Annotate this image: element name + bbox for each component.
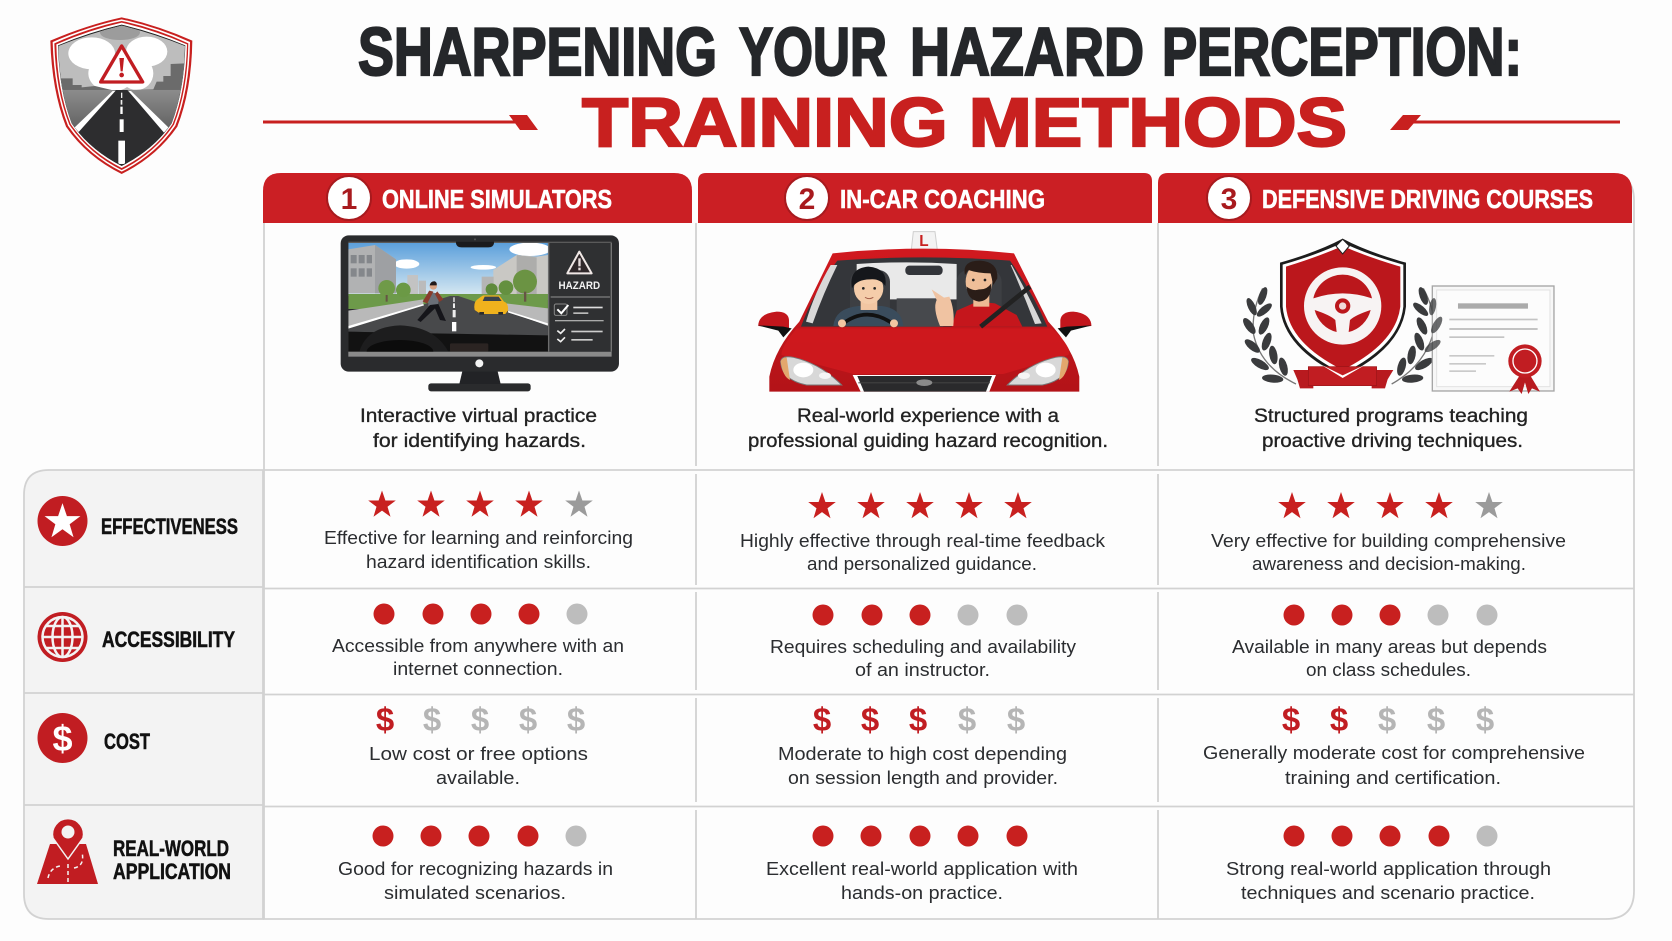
header: defensive driving courses: 3 [1221,183,1237,216]
header: online simulators: ONLINE SIMULATORS [382,184,612,214]
cost: defensive courses: Generally moderate cost for comprehensive [1203,742,1585,763]
row label: effectiveness: EFFECTIVENESS [101,514,238,539]
cost: in-car coaching: $ [958,701,976,738]
effectiveness: defensive courses: Very effective for building comprehensive [1211,530,1566,551]
illustration: simulator monitor [341,235,619,391]
cost: online simulators: Low cost or free options [369,743,588,764]
accessibility: in-car coaching: Requires scheduling and availability [770,636,1077,657]
cost: in-car coaching: $ [861,701,879,738]
text: simulators description: for identifying hazards. [373,430,586,452]
header: online simulators [263,173,692,223]
text: defensive courses description: proactive driving techniques. [1262,430,1523,452]
effectiveness: defensive courses: awareness and decision-making. [1252,553,1526,574]
text: coaching description: Real-world experience with a [797,405,1059,427]
real-world application: defensive courses [1226,826,1551,903]
cost: defensive courses: $ [1427,701,1445,738]
accessibility: defensive courses: on class schedules. [1306,659,1471,680]
real-world application: online simulators: simulated scenarios. [384,882,566,903]
cost: in-car coaching: on session length and provider. [788,767,1058,788]
accessibility: in-car coaching [770,604,1077,680]
accessibility: online simulators: Accessible from anywhere with an [332,635,624,656]
illustration: red training car [758,232,1092,392]
header: in-car coaching [698,173,1152,223]
row label: effectiveness [38,496,238,546]
title: TRAINING METHODS [582,84,1347,161]
real-world application: online simulators: Good for recognizing hazards in [338,858,613,879]
real-world application: online simulators [338,826,613,903]
real-world application: in-car coaching: Excellent real-world application with [766,858,1078,879]
accessibility: online simulators [332,604,624,679]
effectiveness: in-car coaching: Highly effective through real-time feedback [740,530,1106,551]
cost: defensive courses: training and certification. [1285,767,1501,788]
header: defensive driving courses: DEFENSIVE DRIVING COURSES [1262,184,1593,214]
row label: real-world application [37,819,231,884]
cost: in-car coaching: $ [813,701,831,738]
row label: cost: COST [104,729,150,754]
title rule left [263,115,538,130]
cost: online simulators: $ [567,701,585,738]
cost: in-car coaching: $ [909,701,927,738]
row label: accessibility [38,612,235,662]
cost: in-car coaching [778,701,1067,788]
effectiveness: in-car coaching [740,492,1106,574]
cost: in-car coaching: $ [1007,701,1025,738]
real-world application: in-car coaching [766,826,1078,903]
cost: online simulators: available. [436,767,520,788]
cost: online simulators: $ [376,701,394,738]
text: defensive courses description: Structured programs teaching [1254,405,1528,427]
text: coaching description: professional guiding hazard recognition. [748,430,1108,452]
title: HAZARD [910,14,1144,90]
title: SHARPENING [358,14,717,90]
real-world application: defensive courses: techniques and scenario practice. [1241,882,1535,903]
title: YOUR [739,14,887,90]
cost: defensive courses: $ [1378,701,1396,738]
cost: online simulators [369,701,588,788]
accessibility: online simulators: internet connection. [393,658,563,679]
cost: online simulators: $ [519,701,537,738]
header: defensive driving courses [1158,173,1632,223]
illustration: red training car: L [919,233,929,250]
cost: online simulators: $ [423,701,441,738]
row label: cost: $ [52,718,73,759]
cost: in-car coaching: Moderate to high cost depending [778,743,1067,764]
accessibility: defensive courses: Available in many areas but depends [1232,636,1547,657]
logo: hazard shield [50,17,192,174]
cost: defensive courses [1203,701,1585,788]
cost: defensive courses: $ [1476,701,1494,738]
text: simulators description: Interactive virtual practice [360,405,597,427]
text: coaching description [748,405,1108,452]
cost: defensive courses: $ [1282,701,1300,738]
row label: real-world application: APPLICATION [113,859,231,884]
row label: accessibility: ACCESSIBILITY [102,627,235,652]
cost: online simulators: $ [471,701,489,738]
effectiveness: online simulators: hazard identification skills. [366,551,591,572]
effectiveness: defensive courses [1211,492,1566,574]
effectiveness: in-car coaching: and personalized guidance. [807,553,1037,574]
title rule right [1390,115,1620,130]
header: in-car coaching: IN-CAR COACHING [840,184,1045,214]
accessibility: in-car coaching: of an instructor. [855,659,990,680]
effectiveness: online simulators [324,490,633,572]
accessibility: defensive courses [1232,604,1547,680]
real-world application: in-car coaching: hands-on practice. [841,882,1003,903]
cost: defensive courses: $ [1330,701,1348,738]
effectiveness: online simulators: Effective for learning and reinforcing [324,527,633,548]
header: in-car coaching: 2 [799,183,815,216]
real-world application: defensive courses: Strong real-world application through [1226,858,1551,879]
text: simulators description [360,405,597,452]
illustration: simulator monitor: HAZARD [558,280,600,292]
row label: cost [38,713,150,763]
illustration: shield, laurels and certificate [1241,239,1554,394]
title [358,14,1522,161]
text: defensive courses description [1254,405,1528,452]
title: PERCEPTION: [1162,14,1522,90]
table frame and grid [24,174,1634,919]
row label: real-world application: REAL-WORLD [113,836,229,861]
header: online simulators: 1 [341,183,357,216]
